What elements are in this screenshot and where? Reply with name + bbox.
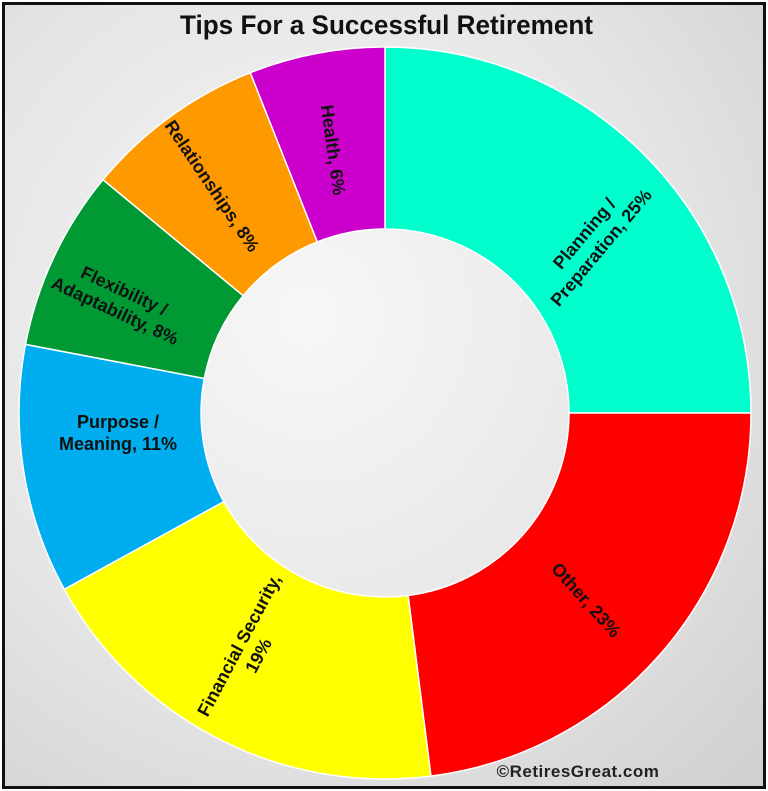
watermark: ©RetiresGreat.com — [497, 762, 659, 781]
label: Health: Health, 6% — [317, 104, 349, 196]
segment: Purpose / Meaning — [19, 344, 224, 589]
segment: Planning / Preparation — [385, 47, 751, 413]
segment: Financial Security — [64, 502, 431, 779]
segment: Health — [250, 47, 385, 242]
title: Tips For a Successful Retirement — [180, 10, 593, 40]
label: Relationships: Relationships, 8% — [161, 117, 263, 255]
label: Planning / Preparation: Planning / — [549, 194, 620, 273]
label: Purpose / Meaning: Purpose / — [77, 412, 159, 432]
label: Financial Security: 19% — [241, 635, 276, 676]
label: Flexibility / Adaptability: Adaptability, 8% — [48, 273, 182, 349]
label: Purpose / Meaning: Meaning, 11% — [59, 434, 177, 454]
label: Planning / Preparation: Preparation, 25% — [547, 185, 656, 310]
label: Purpose / Meaning — [59, 412, 177, 454]
segment: Flexibility / Adaptability — [26, 180, 243, 378]
label: Flexibility / Adaptability: Flexibility / — [78, 262, 171, 320]
label: Financial Security: Financial Security, — [193, 571, 285, 720]
segment: Other — [408, 413, 751, 776]
segment: Relationships — [103, 73, 317, 296]
label: Other: Other, 23% — [547, 559, 625, 641]
